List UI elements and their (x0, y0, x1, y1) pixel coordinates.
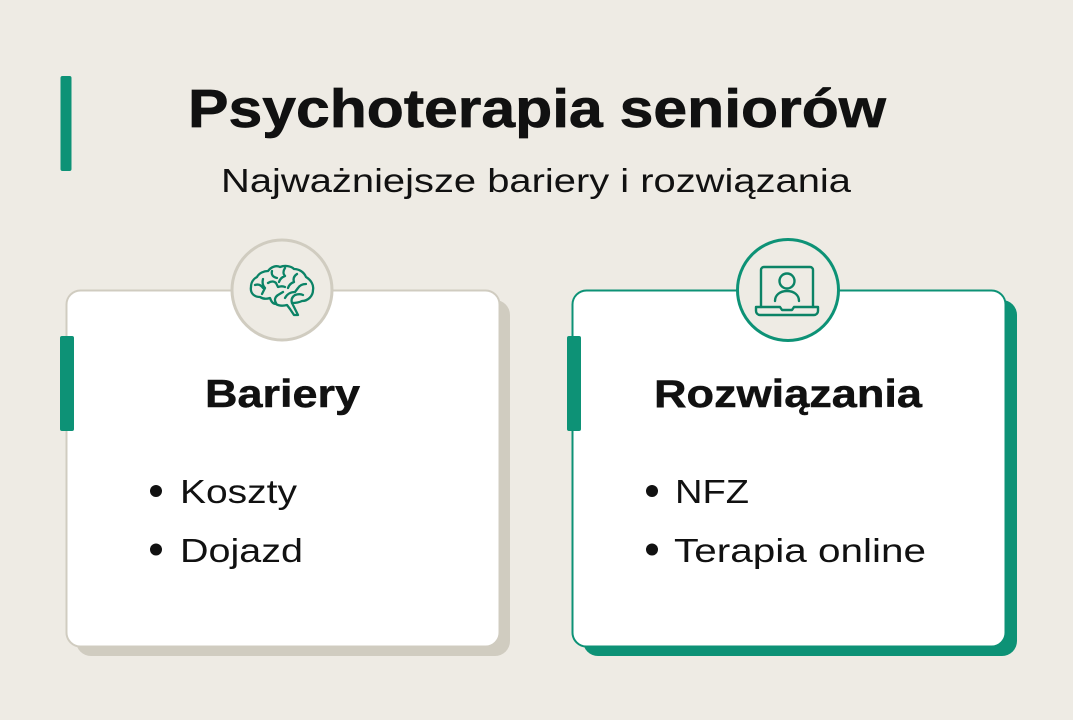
list: bariery (150, 474, 303, 570)
card body: bariery (66, 290, 500, 646)
panel: rozwiazania (567, 240, 1017, 656)
subtitle: Najważniejsze bariery i rozwiązania (221, 162, 852, 199)
panel: bariery (60, 240, 510, 656)
list: rozwiazania: NFZ (675, 474, 749, 511)
title: Psychoterapia seniorów (188, 79, 887, 139)
accent bar: rozwiazania (567, 336, 581, 431)
card shadow: rozwiazania (583, 300, 1017, 656)
list: rozwiazania (646, 474, 926, 570)
list: rozwiazania: Terapia online (674, 533, 926, 570)
accent bar: header (60, 76, 72, 171)
list: bariery: Dojazd (180, 533, 303, 570)
heading: rozwiazania: Rozwiązania (654, 373, 922, 416)
accent bar: bariery (60, 336, 74, 431)
card shadow: bariery (76, 300, 510, 656)
heading: bariery: Bariery (205, 373, 360, 416)
card body: rozwiazania (572, 290, 1006, 646)
list: bariery: Koszty (180, 474, 297, 511)
icon: brain (232, 240, 332, 340)
icon: laptop with person (738, 240, 838, 340)
